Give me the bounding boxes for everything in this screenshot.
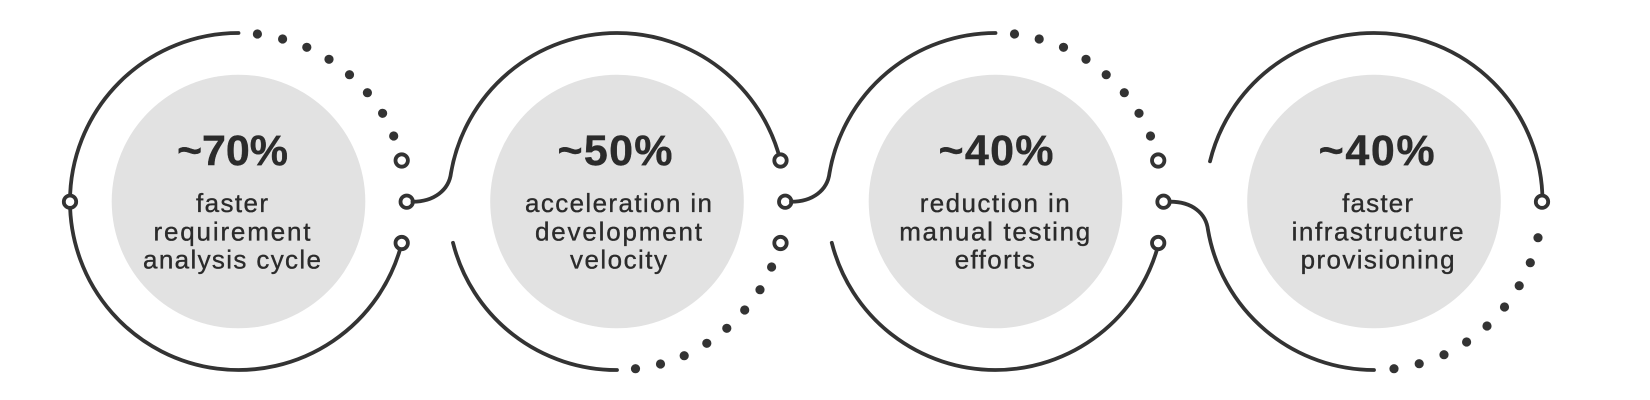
- stat 2: ~50%: [558, 127, 672, 175]
- description 4: faster: [1342, 188, 1413, 218]
- stat 3: ~40%: [938, 127, 1054, 175]
- dotted arc 1: [253, 29, 398, 141]
- description 4: [1292, 188, 1464, 275]
- ring arc 4 lower with connector: [1170, 202, 1374, 370]
- gray disc 2: [490, 75, 744, 328]
- panel: reduction in manual testing: [791, 29, 1170, 370]
- description 4: infrastructure: [1292, 216, 1464, 246]
- description 2: velocity: [570, 245, 667, 275]
- description 3: [899, 188, 1090, 275]
- description 1: faster: [196, 188, 268, 218]
- node marker 4: [1536, 196, 1548, 208]
- dotted arc 4: [1389, 233, 1543, 373]
- panel: faster infrastructure provisioning: [1170, 33, 1548, 373]
- description 2: development: [535, 216, 703, 246]
- node markers 1: [64, 154, 413, 249]
- stat 1: ~70%: [177, 127, 288, 175]
- description 3: reduction in: [920, 188, 1070, 218]
- panel: acceleration in development velocity: [412, 33, 791, 373]
- gray disc 3: [869, 75, 1122, 328]
- gray disc 4: [1247, 75, 1501, 328]
- description 4: provisioning: [1301, 245, 1455, 275]
- ring arc 2 upper with connector: [412, 33, 780, 202]
- description 1: analysis cycle: [143, 245, 321, 275]
- node markers 3: [1152, 154, 1170, 249]
- panel: faster requirement analysis: [64, 29, 413, 370]
- description 3: efforts: [955, 245, 1035, 275]
- description 2: acceleration in: [525, 188, 712, 218]
- ring arc 4 upper: [1210, 33, 1542, 201]
- ring arc 1: [70, 33, 402, 370]
- stat 4: ~40%: [1319, 127, 1435, 175]
- dotted arc 2: [631, 262, 776, 373]
- node markers 2: [774, 154, 791, 249]
- description 1: [143, 188, 321, 275]
- gray disc 1: [112, 75, 365, 328]
- ring arc 2 lower: [453, 243, 617, 370]
- dotted arc 3: [1010, 29, 1155, 141]
- description 1: requirement: [154, 216, 311, 246]
- ring arc 3 lower: [832, 243, 1159, 370]
- description 3: manual testing: [899, 216, 1090, 246]
- ring arc 3 upper with connector: [791, 33, 996, 202]
- description 2: [525, 188, 712, 275]
